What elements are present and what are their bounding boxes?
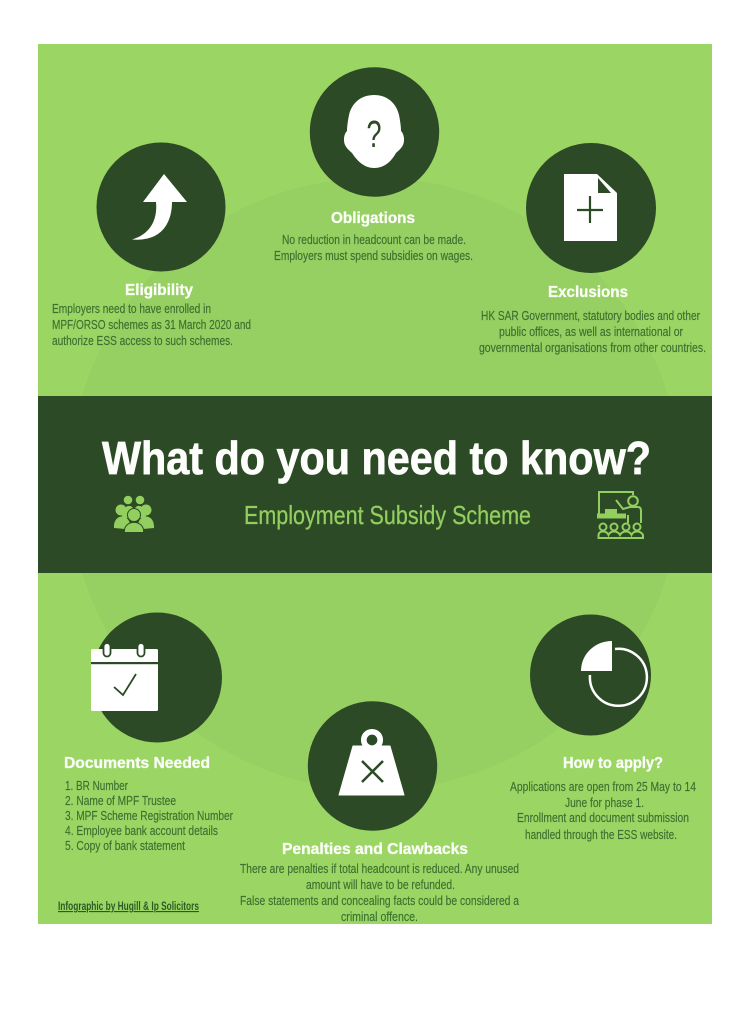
heading: penalties and clawbacks: Penalties and Clawbacks bbox=[282, 841, 468, 858]
text: eligibility details: MPF/ORSO schemes as 31 March 2020 and bbox=[52, 317, 251, 332]
heading: obligations: Obligations bbox=[331, 210, 415, 227]
icon: pie chart bbox=[530, 614, 651, 736]
text: documents list: 2. Name of MPF Trustee bbox=[65, 793, 176, 808]
text: penalties details: False statements and concealing facts could be considered a bbox=[240, 893, 520, 908]
icon: head with question mark: ? bbox=[366, 114, 382, 156]
text: how to apply details: handled through the ESS website. bbox=[525, 827, 677, 842]
text: eligibility details: authorize ESS access to such schemes. bbox=[52, 333, 233, 348]
text: documents list: 5. Copy of bank statement bbox=[65, 838, 185, 853]
text: eligibility details bbox=[52, 301, 251, 348]
text: exclusions details bbox=[479, 308, 706, 355]
text: penalties details: There are penalties if total headcount is reduced. Any unused bbox=[240, 861, 519, 876]
panel: how to apply bbox=[510, 614, 696, 842]
icon: head with question mark bbox=[310, 67, 439, 197]
green background panel bbox=[38, 44, 712, 924]
title: What do you need to know? bbox=[102, 432, 651, 484]
text: how to apply details: Applications are open from 25 May to 14 bbox=[510, 779, 696, 794]
central title band bbox=[38, 396, 712, 573]
icon: calendar with tick bbox=[91, 612, 222, 742]
heading: how to apply: How to apply? bbox=[563, 755, 663, 772]
text: obligations details bbox=[274, 232, 473, 263]
text: how to apply details: June for phase 1. bbox=[565, 795, 644, 810]
text: documents list: 1. BR Number bbox=[65, 778, 129, 793]
text: documents list: 3. MPF Scheme Registration Number bbox=[65, 808, 234, 823]
icon: teacher and class bbox=[598, 492, 643, 538]
text: penalties details: criminal offence. bbox=[341, 909, 418, 924]
large background circle bbox=[69, 178, 681, 790]
subtitle: Employment Subsidy Scheme bbox=[244, 500, 531, 530]
text: how to apply details: Enrollment and document submission bbox=[517, 810, 689, 825]
text: exclusions details: public offices, as well as international or bbox=[499, 324, 684, 339]
text: obligations details: No reduction in headcount can be made. bbox=[282, 232, 466, 247]
icon: rising arrow bbox=[96, 142, 226, 272]
panel: obligations bbox=[274, 67, 473, 263]
heading: exclusions: Exclusions bbox=[548, 284, 628, 301]
icon: weight with cross bbox=[308, 701, 437, 831]
panel: eligibility bbox=[52, 142, 251, 348]
text: documents list bbox=[65, 778, 234, 853]
panel: documents needed bbox=[64, 612, 234, 853]
credit line: Infographic by Hugill & Ip Solicitors bbox=[58, 901, 199, 913]
text: documents list: 4. Employee bank account details bbox=[65, 823, 218, 838]
text: penalties details bbox=[240, 861, 520, 924]
heading: eligibility: Eligibility bbox=[125, 282, 193, 299]
text: penalties details: amount will have to be refunded. bbox=[306, 877, 455, 892]
icon: group of people bbox=[114, 496, 154, 532]
text: obligations details: Employers must spend subsidies on wages. bbox=[274, 248, 473, 263]
panel: exclusions bbox=[479, 143, 706, 355]
heading: documents needed: Documents Needed bbox=[64, 755, 210, 772]
text: eligibility details: Employers need to have enrolled in bbox=[52, 301, 211, 316]
icon: document with plus bbox=[526, 143, 656, 273]
text: how to apply details bbox=[510, 779, 696, 842]
panel: penalties and clawbacks bbox=[240, 701, 520, 924]
